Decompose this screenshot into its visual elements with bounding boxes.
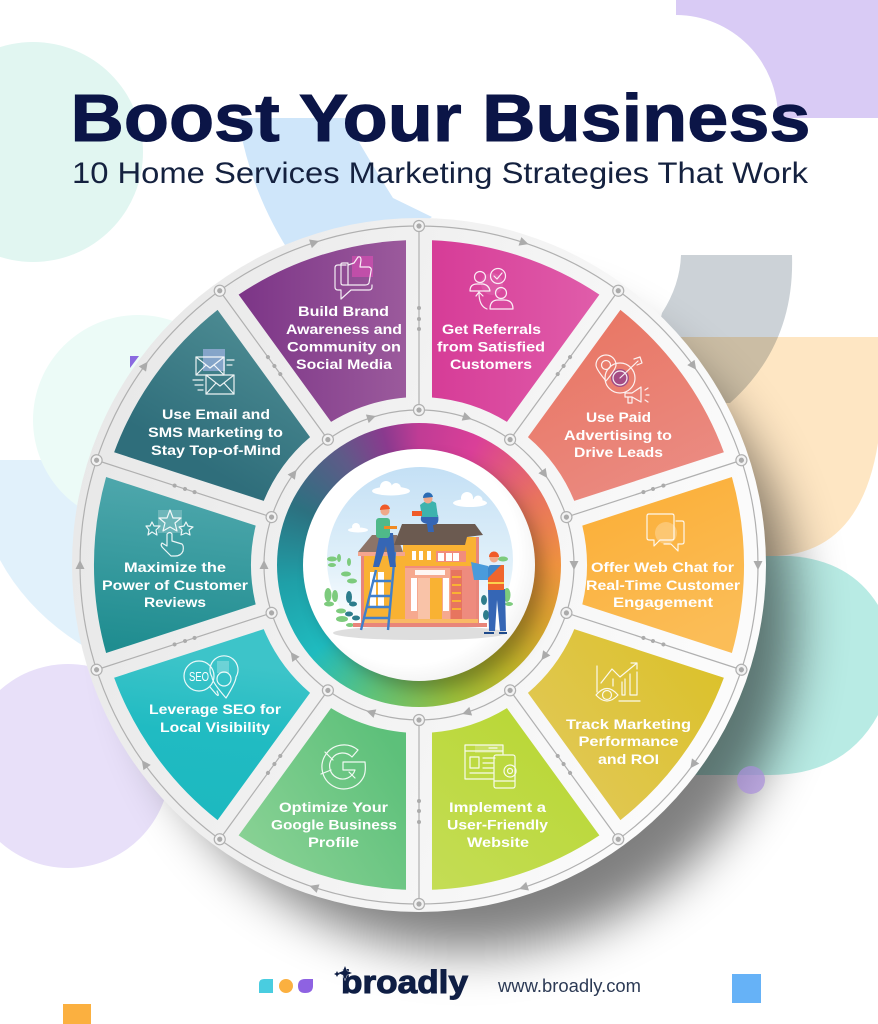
label: seo xyxy=(149,702,282,736)
label: web chat: Offer Web Chat for xyxy=(591,560,735,576)
label: google profile xyxy=(271,800,397,851)
label: referrals: Get Referrals xyxy=(442,322,541,338)
icon: chart and eye xyxy=(596,663,640,701)
house xyxy=(353,524,487,627)
label: reviews: Maximize the xyxy=(124,560,226,576)
center disc shadow xyxy=(315,462,543,690)
icon: thumbs up xyxy=(335,256,373,299)
label: tracking: Track Marketing xyxy=(566,717,691,733)
icon: referrals xyxy=(470,268,513,309)
ground shadow xyxy=(333,626,507,640)
dark leaves xyxy=(345,591,489,620)
label: seo: Leverage SEO for xyxy=(149,702,282,718)
label: email and sms: SMS Marketing to xyxy=(148,425,283,441)
label: reviews: Reviews xyxy=(144,595,206,611)
label: social media: Social Media xyxy=(296,357,392,373)
website url: www.broadly.com xyxy=(497,976,641,996)
seo icon text: SEO xyxy=(189,670,209,684)
logo wordmark: broadly xyxy=(341,964,468,1000)
small purple dot xyxy=(737,766,765,794)
subtitle: 10 Home Services Marketing Strategies That Work xyxy=(72,157,808,190)
label: tracking: and ROI xyxy=(598,752,659,768)
label: reviews xyxy=(102,560,249,611)
label: social media: Community on xyxy=(287,340,401,356)
label: website: Website xyxy=(467,835,529,851)
center disc xyxy=(303,449,535,681)
label: social media: Awareness and xyxy=(286,322,402,338)
label: email and sms: Stay Top-of-Mind xyxy=(151,443,281,459)
label: paid advertising: Advertising to xyxy=(564,428,672,444)
label: paid advertising: Drive Leads xyxy=(574,445,663,461)
title: Boost Your Business xyxy=(70,81,810,156)
wheel connector lines and arrows xyxy=(57,220,781,910)
label: tracking: Performance xyxy=(578,734,679,750)
label: social media xyxy=(286,304,402,373)
icon: website and phone xyxy=(465,745,516,788)
icon: web chat xyxy=(647,514,684,551)
label: web chat xyxy=(586,560,741,611)
icon: seo magnifier xyxy=(184,656,238,698)
label: tracking xyxy=(566,717,691,768)
label: paid advertising xyxy=(564,410,672,461)
clouds xyxy=(348,481,487,532)
icon: google g xyxy=(321,745,365,789)
label: google profile: Optimize Your xyxy=(279,800,389,816)
label: google profile: Profile xyxy=(308,835,359,851)
sky circle xyxy=(327,467,513,653)
label: web chat: Engagement xyxy=(613,595,713,611)
label: social media: Build Brand xyxy=(298,304,389,320)
label: website: Implement a xyxy=(449,800,546,816)
label: website xyxy=(447,800,548,851)
worker on roof xyxy=(412,492,438,532)
icon: stars and hand xyxy=(146,510,193,556)
label: email and sms xyxy=(148,407,283,459)
label: website: User-Friendly xyxy=(447,818,548,834)
label: google profile: Google Business xyxy=(271,818,397,834)
worker on ladder xyxy=(373,504,397,567)
label: email and sms: Use Email and xyxy=(162,407,270,423)
label: referrals xyxy=(437,322,545,373)
colored gradient ring xyxy=(277,423,561,707)
label: referrals: from Satisfied xyxy=(437,340,545,356)
footer color marks xyxy=(259,979,313,993)
ladder xyxy=(361,552,395,630)
label: referrals: Customers xyxy=(450,357,532,373)
wheel disk xyxy=(72,218,766,912)
wheel shadow xyxy=(136,291,796,951)
icon: envelopes xyxy=(193,349,234,394)
leaves xyxy=(324,554,513,627)
wheel segments xyxy=(94,229,744,901)
label: reviews: Power of Customer xyxy=(102,578,249,594)
icon: target and megaphone xyxy=(596,355,649,403)
label: paid advertising: Use Paid xyxy=(586,410,651,426)
label: seo: Local Visibility xyxy=(160,720,270,736)
label: web chat: Real-Time Customer xyxy=(586,578,741,594)
worker with blueprint xyxy=(471,551,507,634)
logo sparkle xyxy=(334,966,352,980)
